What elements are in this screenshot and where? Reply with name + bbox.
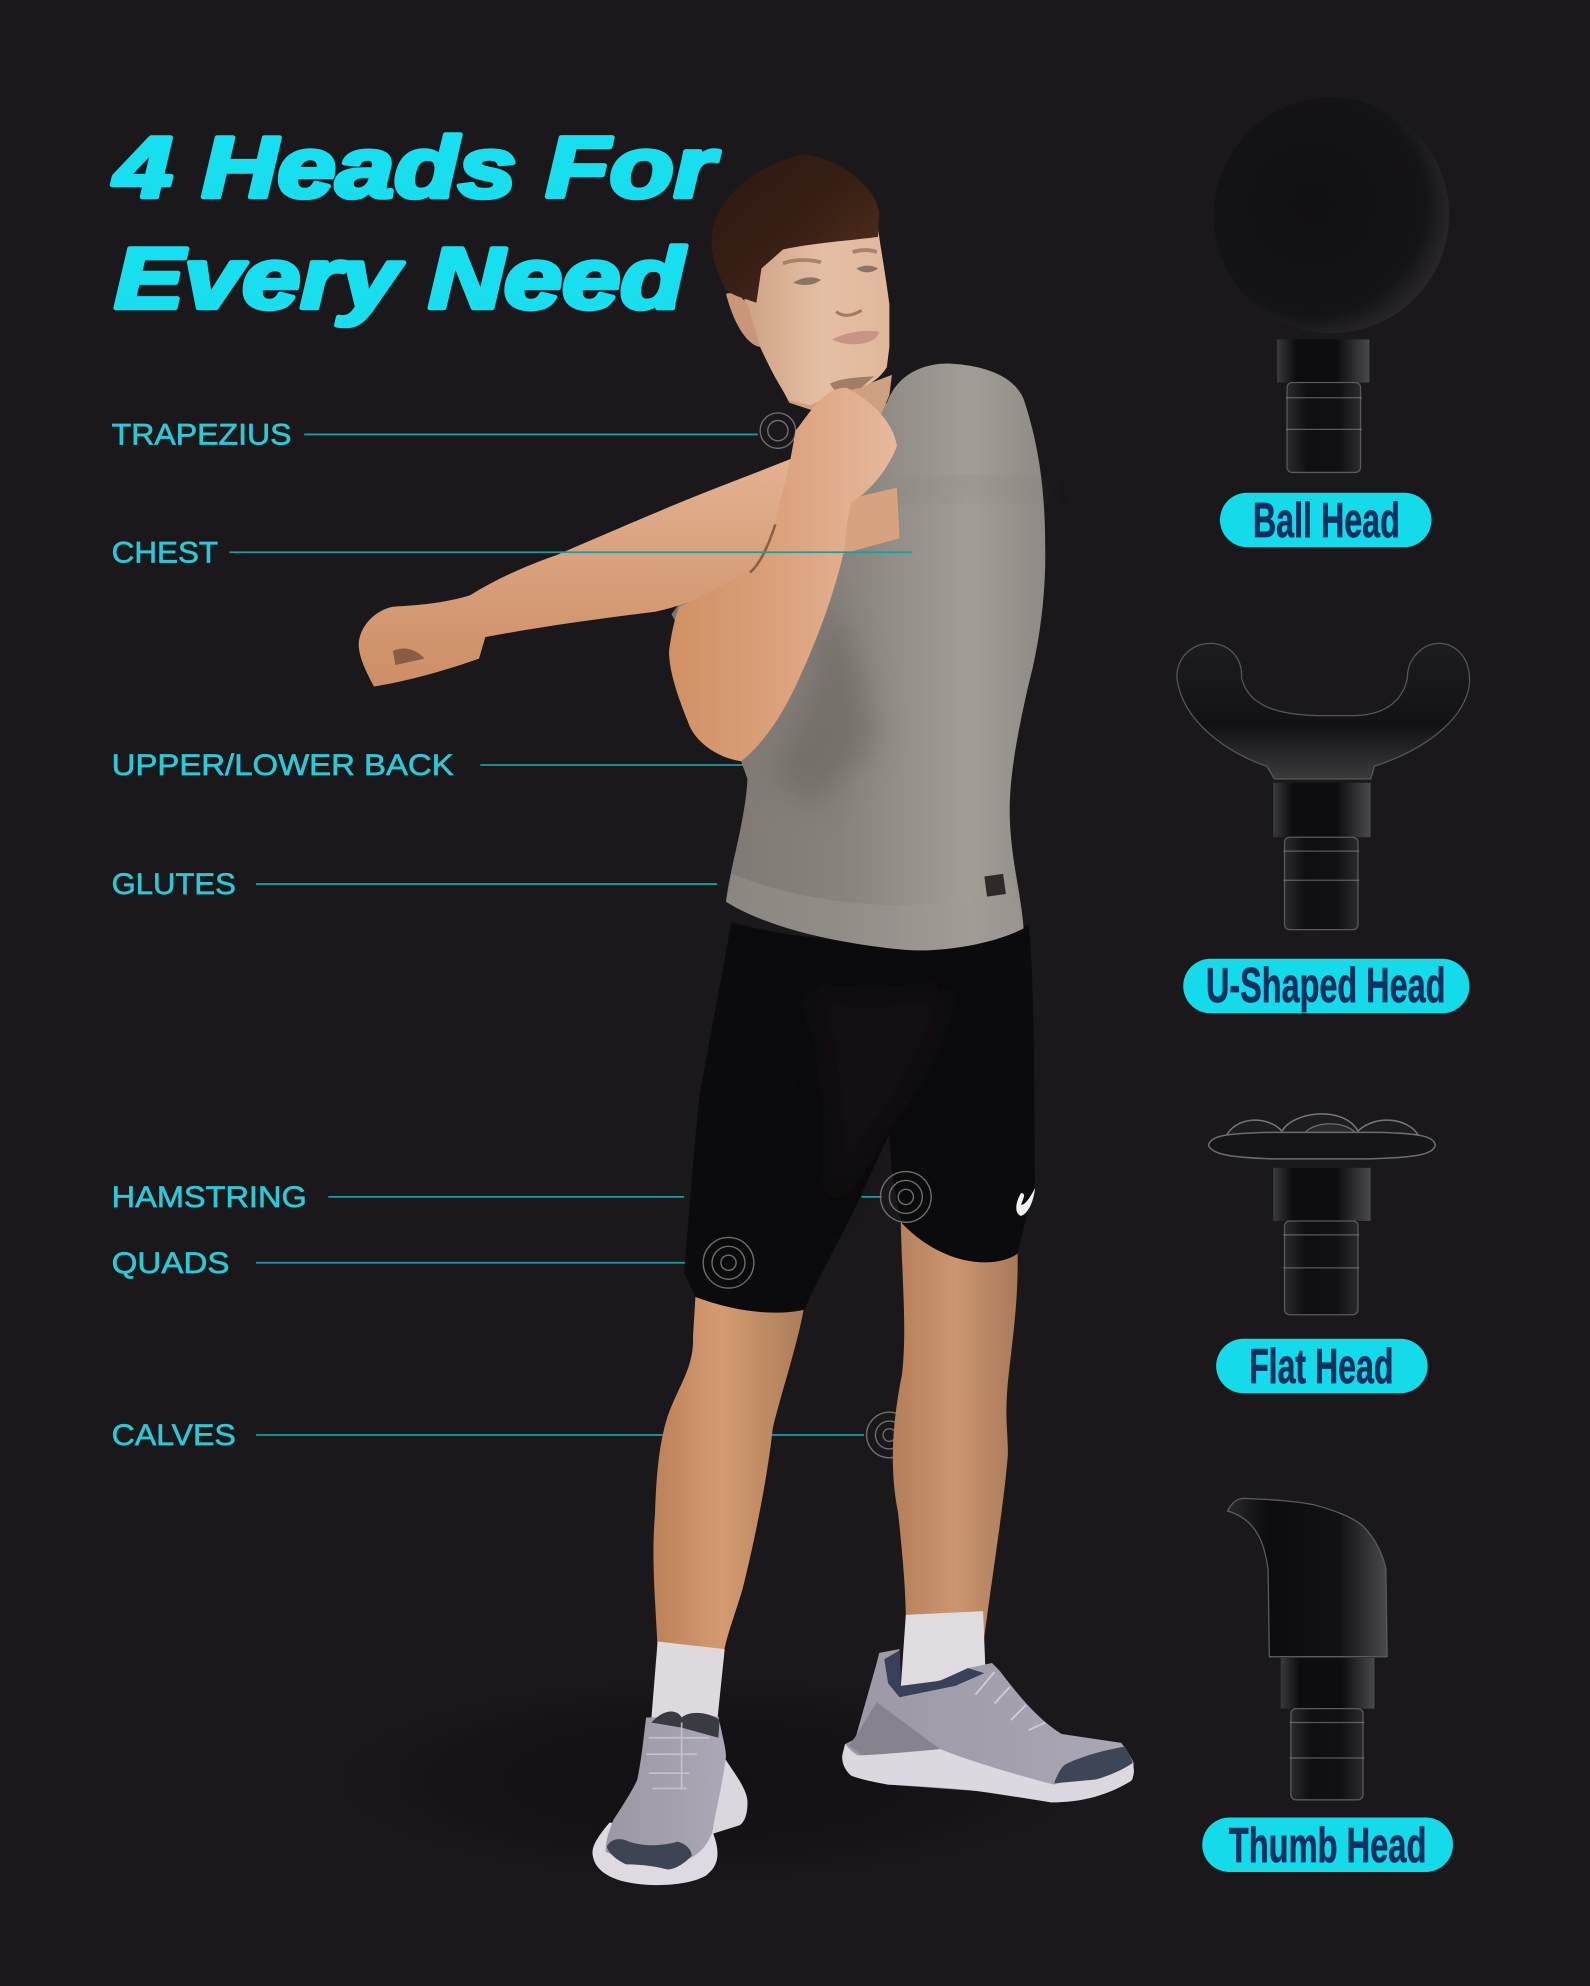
ball collar [1277,339,1369,383]
right shoe midsole [842,1744,1134,1802]
left shoe upper [606,1716,726,1863]
right shoe heel panel [849,1702,940,1755]
pill: u-shaped head [1183,958,1469,1013]
massage head: flat [1209,1114,1435,1315]
floor shadow [317,1672,1102,1887]
massage head: ball [1214,98,1449,472]
pill: ball head: Ball Head [1253,493,1400,548]
pill: ball head [1220,493,1431,548]
sleeve fold [897,483,1043,496]
arm crease [750,524,775,572]
bicep under sleeve [842,488,899,553]
shorts fold shading [798,988,950,1216]
u-shaped collar [1273,783,1371,837]
hair [712,155,879,303]
left shoe [592,1711,748,1885]
callout: hamstring: HAMSTRING [112,1181,307,1214]
shirt lower band [726,874,1024,950]
left shoe tongue [651,1711,720,1738]
right leg [893,1222,1018,1647]
thumb top [1228,1498,1387,1657]
folded arm [669,388,897,761]
thumb collar [1281,1658,1374,1709]
callout: chest: CHEST [112,536,218,569]
hamstring line stub [861,1196,882,1198]
right shoe [842,1649,1134,1802]
left sock [651,1641,725,1723]
shirt tag [984,874,1006,897]
icon: nike swoosh [1016,1188,1035,1216]
neck [760,347,892,431]
ball [1214,98,1449,333]
callout: quads: QUADS [112,1247,229,1280]
figure: man stretching [359,155,1134,1885]
thumb shaft [1290,1709,1364,1800]
shirt [672,364,1045,950]
callout: upper/lower back: UPPER/LOWER BACK [112,749,454,782]
right shoe toe cap [1054,1747,1133,1783]
right shoe laces [975,1672,1045,1730]
callout: trapezius: TRAPEZIUS [112,419,292,452]
u-shaped top [1177,643,1470,779]
pill: u-shaped head: U-Shaped Head [1206,958,1445,1013]
flat plate [1209,1132,1435,1159]
extended arm [359,459,811,686]
flat domes [1226,1114,1419,1136]
left shoe back midsole [712,1754,748,1834]
u-shaped shaft [1283,837,1359,930]
callout: glutes: GLUTES [112,868,236,901]
left leg [653,1294,804,1654]
shirt chest shading [773,595,874,811]
flat collar [1273,1168,1371,1221]
ear [726,293,760,347]
callout: calves [112,1412,912,1458]
callout: calves: CALVES [112,1419,236,1452]
left shoe laces [646,1723,710,1788]
face [744,218,889,405]
shorts [684,922,1035,1313]
massage head: thumb [1228,1498,1387,1800]
massage head: u-shaped [1177,643,1470,930]
title [112,120,720,327]
pill: thumb head: Thumb Head [1229,1818,1426,1873]
pill: thumb head [1202,1818,1453,1873]
left shoe outsole [592,1823,717,1885]
target: quads rings [703,1237,754,1288]
title: Every Need [114,231,687,327]
flat shaft [1283,1221,1359,1315]
right shoe collar band [884,1650,984,1697]
pill: flat head: Flat Head [1249,1339,1393,1394]
pill: flat head [1216,1339,1428,1394]
callout: trapezius [112,413,796,452]
left shoe toe cap [607,1839,692,1869]
flat front dome [1302,1124,1358,1136]
title: 4 Heads For [112,120,720,216]
ball shaft [1286,383,1362,472]
finger shadow [393,648,425,665]
right shoe upper [842,1649,1134,1802]
right sock [901,1611,986,1691]
facial features [783,250,879,393]
target: hamstring rings [880,1172,931,1222]
